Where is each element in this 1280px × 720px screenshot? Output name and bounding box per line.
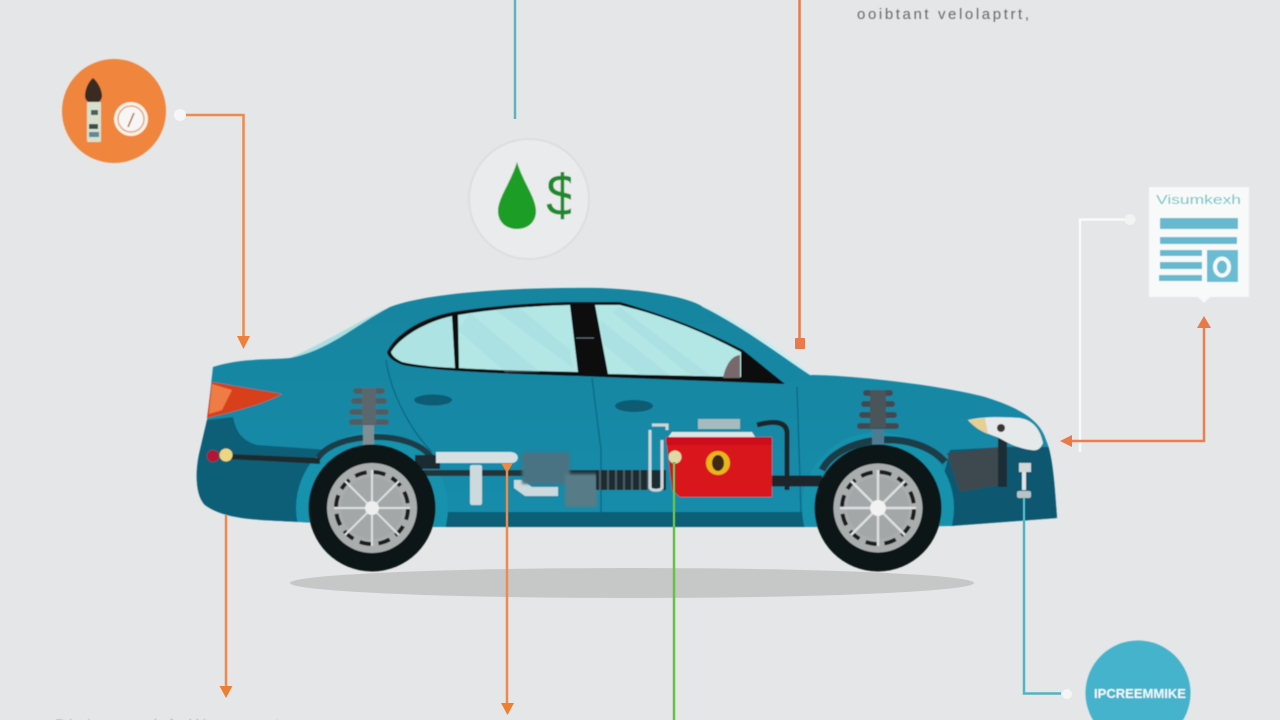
door lines <box>386 360 801 512</box>
rear window reflection <box>290 306 392 358</box>
door handle front <box>615 400 653 412</box>
connector: green fuel line <box>673 462 675 720</box>
windshield reflection <box>703 305 812 375</box>
connector: rear bumper down arrow <box>220 515 232 698</box>
teal badge <box>1086 640 1190 720</box>
card text lines <box>1159 218 1238 281</box>
connector: orange line to windshield <box>795 0 805 349</box>
icon: gauge <box>114 102 148 136</box>
car body <box>197 288 1057 527</box>
rear suspension <box>318 388 432 458</box>
report card <box>1149 187 1249 303</box>
tail light <box>207 382 282 418</box>
rear quarter glass <box>391 316 455 368</box>
car <box>190 288 1060 584</box>
icon: dollar sign: $ <box>546 163 578 228</box>
front wheel <box>814 444 942 572</box>
rear wheel <box>308 444 436 572</box>
connector: teal top line <box>514 0 516 119</box>
connector: orange badge to trunk <box>174 109 250 349</box>
ground shadow <box>290 568 974 598</box>
tank emblem <box>706 451 730 475</box>
connector: white line to report card <box>1080 214 1136 452</box>
exhaust system <box>415 452 666 507</box>
pillar seam <box>576 337 594 339</box>
door handle rear <box>414 394 452 406</box>
headlight <box>968 417 1043 450</box>
icon: green drop <box>498 162 536 229</box>
front suspension <box>822 390 945 470</box>
connector: orange headlight to report card <box>1060 316 1211 447</box>
icon: rocket <box>85 78 102 103</box>
windows <box>387 302 785 384</box>
fuel tank <box>650 419 822 497</box>
icon: fuel drop and dollar badge <box>498 162 572 230</box>
teal badge: IPCREEMMIKE <box>1094 687 1186 701</box>
muffler <box>522 452 597 507</box>
top caption: ooibtant velolaptrt, <box>857 6 1029 23</box>
icon: orange gauge badge <box>62 59 166 163</box>
front door glass <box>595 305 741 377</box>
card icon box <box>1207 250 1238 282</box>
lower body shading <box>196 416 1058 528</box>
icon: bottle <box>87 102 101 142</box>
front glass glare <box>600 307 710 375</box>
connector: teal line to badge <box>1024 498 1072 699</box>
connector: exhaust down arrow <box>501 463 514 715</box>
front sensor <box>1017 463 1031 498</box>
rear reflector bar <box>207 448 320 464</box>
fuel gauge knob <box>668 450 682 464</box>
seat headrest <box>723 355 740 378</box>
card title: Visumkexh <box>1156 192 1241 207</box>
window glare <box>458 308 573 372</box>
rear door glass <box>458 305 578 372</box>
